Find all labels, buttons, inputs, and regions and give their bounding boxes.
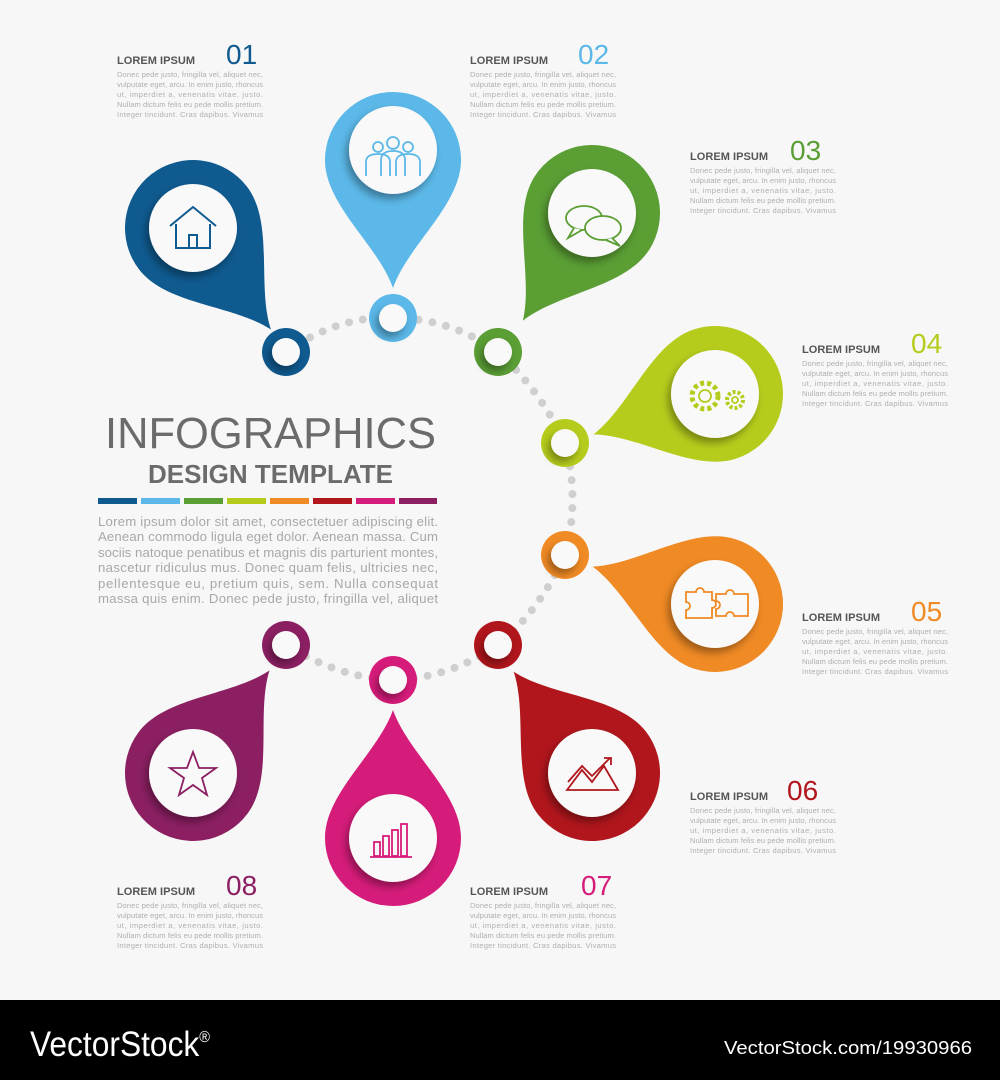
- drop 07: [325, 710, 461, 906]
- drop 03: [466, 119, 686, 357]
- intro paragraph: massa quis enim. Donec pede justo, fringilla vel, aliquet: [98, 591, 438, 606]
- text block 05: Nullam dictum felis eu pede mollis pretium.: [802, 657, 948, 666]
- text block 05: 05: [911, 596, 942, 627]
- text block 03: LOREM IPSUM: [690, 151, 768, 163]
- text block 02: ut, imperdiet a, venenatis vitae, justo.: [470, 90, 616, 99]
- text block 02: [470, 39, 616, 119]
- text block 03: Nullam dictum felis eu pede mollis pretium.: [690, 196, 836, 205]
- icon: house: [170, 207, 216, 248]
- text block 08: Nullam dictum felis eu pede mollis pretium.: [117, 931, 263, 940]
- text block 01: [117, 39, 263, 119]
- text block 07: [470, 870, 616, 950]
- text block 02: Nullam dictum felis eu pede mollis pretium.: [470, 100, 616, 109]
- text block 05: [802, 596, 948, 676]
- icon: chart mountain: [567, 758, 618, 790]
- text block 07: 07: [581, 870, 612, 901]
- drop 04: [572, 308, 801, 499]
- text block 07: Integer tincidunt. Cras dapibus. Vivamus: [470, 941, 616, 950]
- node rings: [262, 294, 589, 704]
- text block 06: Donec pede justo, fringilla vel, aliquet nec,: [690, 806, 836, 815]
- icon: puzzle: [686, 588, 748, 618]
- text block 07: Nullam dictum felis eu pede mollis pretium.: [470, 931, 616, 940]
- footer bar: VectorStock.com/19930966: [724, 1038, 972, 1058]
- text block 02: LOREM IPSUM: [470, 55, 548, 67]
- text block 08: ut, imperdiet a, venenatis vitae, justo.: [117, 921, 263, 930]
- dotted connector path: [286, 318, 572, 680]
- text block 01: ut, imperdiet a, venenatis vitae, justo.: [117, 90, 263, 99]
- text block 04: Donec pede justo, fringilla vel, aliquet nec,: [802, 359, 948, 368]
- icon: star: [170, 752, 216, 795]
- text block 07: vulputate eget, arcu. In enim justo, rhoncus: [470, 911, 616, 920]
- text block 01: 01: [226, 39, 257, 70]
- text block 08: Integer tincidunt. Cras dapibus. Vivamus: [117, 941, 263, 950]
- intro paragraph: sociis natoque penatibus et magnis dis parturient montes,: [98, 545, 438, 560]
- text block 02: Integer tincidunt. Cras dapibus. Vivamus: [470, 110, 616, 119]
- intro paragraph: Aenean commodo ligula eget dolor. Aenean massa. Cum: [98, 529, 438, 544]
- text block 03: ut, imperdiet a, venenatis vitae, justo.: [690, 186, 836, 195]
- drop 05: [573, 502, 800, 689]
- text block 08: 08: [226, 870, 257, 901]
- text block 06: [690, 775, 836, 855]
- text block 01: Integer tincidunt. Cras dapibus. Vivamus: [117, 110, 263, 119]
- text block 04: ut, imperdiet a, venenatis vitae, justo.: [802, 379, 948, 388]
- icon: people: [366, 137, 420, 176]
- text block 01: LOREM IPSUM: [117, 55, 195, 67]
- text block 02: Donec pede justo, fringilla vel, aliquet nec,: [470, 70, 616, 79]
- text block 07: LOREM IPSUM: [470, 886, 548, 898]
- text block 05: vulputate eget, arcu. In enim justo, rhoncus: [802, 637, 948, 646]
- text block 06: Nullam dictum felis eu pede mollis pretium.: [690, 836, 836, 845]
- icon: bar chart: [370, 824, 412, 857]
- icon: gears: [692, 383, 743, 409]
- text block 04: LOREM IPSUM: [802, 344, 880, 356]
- text block 03: vulputate eget, arcu. In enim justo, rhoncus: [690, 176, 836, 185]
- text block 06: Integer tincidunt. Cras dapibus. Vivamus: [690, 846, 836, 855]
- text block 06: LOREM IPSUM: [690, 791, 768, 803]
- text block 02: 02: [578, 39, 609, 70]
- text block 05: ut, imperdiet a, venenatis vitae, justo.: [802, 647, 948, 656]
- text block 08: [117, 870, 263, 950]
- text block 03: Donec pede justo, fringilla vel, aliquet nec,: [690, 166, 836, 175]
- text block 08: vulputate eget, arcu. In enim justo, rhoncus: [117, 911, 263, 920]
- text block 03: 03: [790, 135, 821, 166]
- text block 02: vulputate eget, arcu. In enim justo, rhoncus: [470, 80, 616, 89]
- intro paragraph: Lorem ipsum dolor sit amet, consectetuer adipiscing elit.: [98, 514, 438, 529]
- drop 01: [98, 133, 325, 371]
- text block 07: ut, imperdiet a, venenatis vitae, justo.: [470, 921, 616, 930]
- text block 08: LOREM IPSUM: [117, 886, 195, 898]
- title: INFOGRAPHICS: [105, 409, 436, 458]
- text block 05: Integer tincidunt. Cras dapibus. Vivamus: [802, 667, 948, 676]
- text block 04: Nullam dictum felis eu pede mollis pretium.: [802, 389, 948, 398]
- intro paragraph: nascetur ridiculus mus. Donec quam felis, ultricies nec,: [98, 560, 438, 575]
- drop 02: [325, 92, 461, 288]
- text block 05: LOREM IPSUM: [802, 612, 880, 624]
- text block 05: Donec pede justo, fringilla vel, aliquet nec,: [802, 627, 948, 636]
- color bars: [98, 498, 437, 504]
- text block 01: Donec pede justo, fringilla vel, aliquet nec,: [117, 70, 263, 79]
- text block 03: Integer tincidunt. Cras dapibus. Vivamus: [690, 206, 836, 215]
- text block 06: ut, imperdiet a, venenatis vitae, justo.: [690, 826, 836, 835]
- footer bar: ®: [199, 1029, 210, 1046]
- text block 03: [690, 135, 836, 215]
- text block 06: 06: [787, 775, 818, 806]
- icon: speech bubbles: [566, 206, 621, 246]
- drop 06: [460, 630, 687, 868]
- drop 08: [98, 630, 324, 868]
- text block 06: vulputate eget, arcu. In enim justo, rhoncus: [690, 816, 836, 825]
- footer bar: [0, 1000, 1000, 1080]
- intro paragraph: pellentesque eu, pretium quis, sem. Nulla consequat: [98, 576, 438, 591]
- text block 04: Integer tincidunt. Cras dapibus. Vivamus: [802, 399, 948, 408]
- footer bar: VectorStock: [30, 1025, 217, 1064]
- text block 01: Nullam dictum felis eu pede mollis pretium.: [117, 100, 263, 109]
- subtitle: DESIGN TEMPLATE: [148, 459, 393, 489]
- text block 07: Donec pede justo, fringilla vel, aliquet nec,: [470, 901, 616, 910]
- text block 08: Donec pede justo, fringilla vel, aliquet nec,: [117, 901, 263, 910]
- text block 01: vulputate eget, arcu. In enim justo, rhoncus: [117, 80, 263, 89]
- text block 04: vulputate eget, arcu. In enim justo, rhoncus: [802, 369, 948, 378]
- text block 04: [802, 328, 948, 408]
- text block 04: 04: [911, 328, 942, 359]
